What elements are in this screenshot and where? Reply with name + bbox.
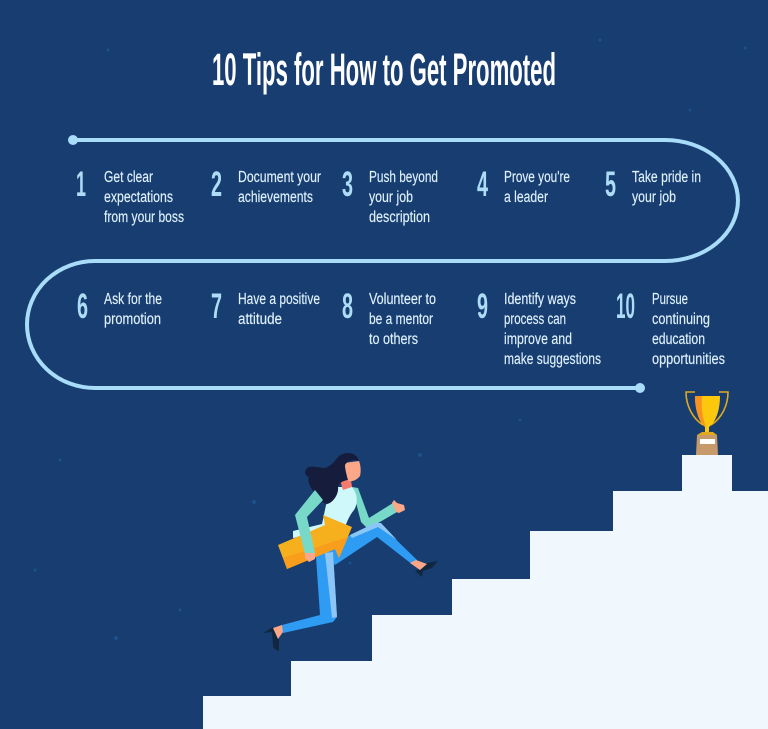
tip 10: continuing — [652, 311, 710, 328]
neck — [340, 480, 352, 490]
tip 10: 10 — [616, 287, 635, 326]
tip 6: Ask for the — [104, 291, 162, 308]
tip 4: a leader — [504, 189, 548, 206]
tip 9: process can — [504, 311, 566, 328]
tip 7: attitude — [238, 311, 282, 328]
tip 3: your job — [369, 189, 413, 206]
tip 9: 9 — [477, 287, 488, 326]
tip 10 — [616, 287, 725, 368]
tip 3: Push beyond — [369, 169, 438, 186]
tip 4: 4 — [477, 165, 488, 204]
tip 7 — [211, 287, 320, 328]
tip 5 — [605, 165, 701, 206]
winding path line — [27, 135, 738, 393]
tip 8: Volunteer to — [369, 291, 436, 308]
tip 9: improve and — [504, 331, 572, 348]
arrow — [278, 515, 352, 569]
tip 1: from your boss — [104, 209, 184, 226]
figure: woman running upstairs with arrow — [263, 453, 438, 651]
tip 8: to others — [369, 331, 418, 348]
front leg — [325, 524, 417, 565]
icon: trophy — [686, 392, 728, 455]
tip 3: 3 — [342, 165, 353, 204]
tip 1: Get clear — [104, 169, 153, 186]
tip 4 — [477, 165, 570, 206]
tip 1: expectations — [104, 189, 173, 206]
tip 8 — [342, 287, 436, 348]
tip 6: 6 — [77, 287, 88, 326]
staircase — [203, 455, 768, 729]
tip 9: make suggestions — [504, 351, 601, 368]
front shoe and foot — [415, 561, 438, 577]
back leg — [282, 552, 337, 633]
tip 2: achievements — [238, 189, 313, 206]
tip 6 — [77, 287, 162, 328]
tip 1 — [76, 165, 184, 226]
tip 2 — [211, 165, 321, 206]
tip 2: Document your — [238, 169, 321, 186]
tip 9 — [477, 287, 601, 368]
tip 2: 2 — [211, 165, 222, 204]
tip 8: be a mentor — [369, 311, 433, 328]
tip 10: opportunities — [652, 351, 725, 368]
tip 9: Identify ways — [504, 291, 576, 308]
tip 3: description — [369, 209, 430, 226]
tip 1: 1 — [76, 165, 86, 204]
far arm — [352, 487, 397, 529]
tip 8: 8 — [342, 287, 353, 326]
tip 3 — [342, 165, 438, 226]
far hand — [392, 500, 405, 513]
hair — [305, 453, 359, 504]
back shoe and foot — [263, 627, 279, 651]
torso — [293, 487, 357, 538]
face — [344, 461, 361, 481]
tip 5: 5 — [605, 165, 616, 204]
tip 10: education — [652, 331, 705, 348]
near arm — [295, 490, 323, 554]
tip 5: Take pride in — [632, 169, 701, 186]
tip 10: Pursue — [652, 291, 688, 308]
tip 7: Have a positive — [238, 291, 320, 308]
tip 7: 7 — [211, 287, 222, 326]
tip 6: promotion — [104, 311, 161, 328]
tip 4: Prove you're — [504, 169, 570, 186]
tip 5: your job — [632, 189, 676, 206]
near hand — [305, 553, 315, 562]
